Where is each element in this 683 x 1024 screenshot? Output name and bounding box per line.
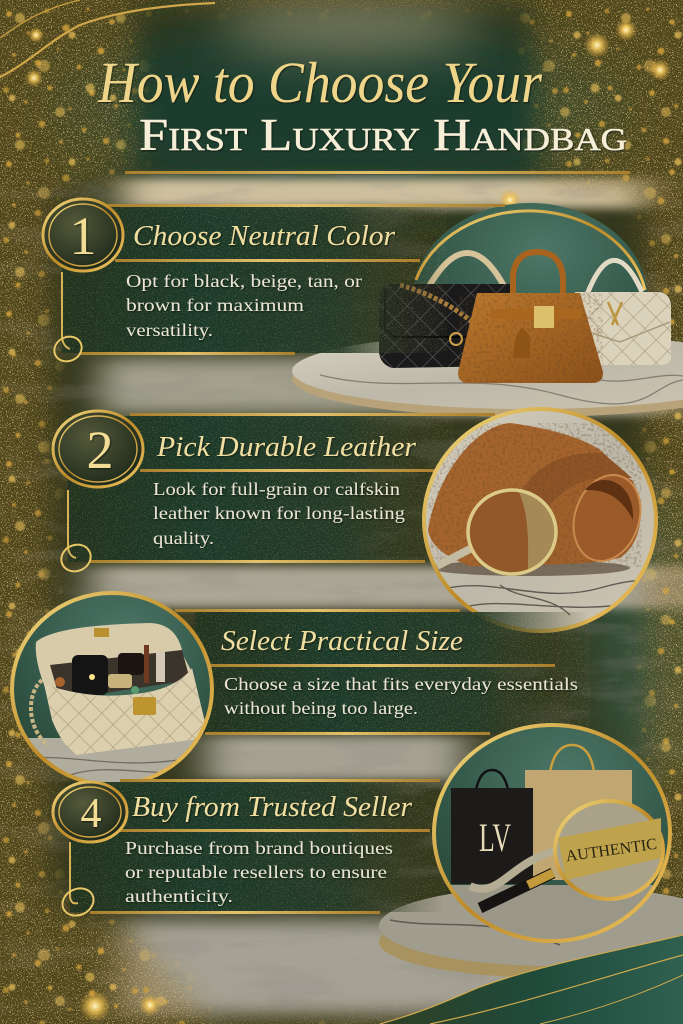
number badge 2: 2 <box>86 420 114 480</box>
step 2 image: rolled leather with magnifier <box>420 405 660 635</box>
quilted body <box>44 668 206 755</box>
step 4 image: shopping bags, tape and magnifier <box>430 722 675 947</box>
text 1: versatility. <box>126 320 213 340</box>
title line 1: How to Choose Your <box>97 50 542 115</box>
panel: step 1 <box>43 199 505 366</box>
text 1: Opt for black, beige, tan, or <box>126 271 362 291</box>
loop ornament <box>50 332 86 366</box>
magnifier <box>555 801 663 899</box>
text 4 <box>125 838 393 906</box>
heading 1: Choose Neutral Color <box>133 220 396 252</box>
step 3 image: open cream bag with essentials <box>10 590 215 790</box>
number badge 4 <box>53 782 127 842</box>
kraft shopping bag <box>525 745 632 880</box>
text 4: authenticity. <box>125 886 233 906</box>
step 1 image ring <box>416 211 645 290</box>
loop ornament <box>58 883 98 921</box>
black quilted bag <box>379 253 512 368</box>
black shopping bag: LV <box>479 815 511 860</box>
bag contents <box>50 645 188 695</box>
text 3: Choose a size that fits everyday essentials <box>224 674 578 694</box>
open flap <box>36 623 192 690</box>
text 1 <box>126 271 362 340</box>
text 2: leather known for long-lasting <box>153 503 405 523</box>
cream bag <box>575 260 671 365</box>
text 4: Purchase from brand boutiques <box>125 838 393 858</box>
text 2: Look for full-grain or calfskin <box>153 479 400 499</box>
number badge 1 <box>43 199 123 271</box>
number badge 1: 1 <box>70 206 96 266</box>
text 3: without being too large. <box>224 698 418 718</box>
heading 4: Buy from Trusted Seller <box>132 791 413 823</box>
text 2 <box>153 479 405 548</box>
panel: step 2 <box>53 411 495 576</box>
authentic label: AUTHENTIC <box>565 836 658 865</box>
title block <box>97 50 630 174</box>
number badge 2 <box>53 411 143 487</box>
step 4 pedestal <box>379 886 683 978</box>
measuring tape <box>470 850 560 889</box>
loop ornament <box>57 540 95 576</box>
bottom wave <box>380 935 683 1024</box>
panel: step 4 <box>53 779 445 921</box>
heading 3: Select Practical Size <box>221 625 463 657</box>
black shopping bag <box>451 770 533 884</box>
text 3 <box>224 674 578 718</box>
pen <box>480 873 553 908</box>
text 1: brown for maximum <box>126 295 304 315</box>
pedestal 1 <box>292 333 683 417</box>
magnifier <box>437 490 556 574</box>
title line 2: First Luxury Handbag <box>139 109 627 160</box>
heading 2: Pick Durable Leather <box>156 431 417 463</box>
brown bag <box>458 252 603 383</box>
number badge 4: 4 <box>80 791 102 837</box>
text 4: or reputable resellers to ensure <box>125 862 387 882</box>
text 2: quality. <box>153 528 214 548</box>
step 1 image: three handbags on marble pedestal <box>292 203 683 417</box>
leather roll <box>428 423 651 570</box>
panel: step 3 <box>175 609 590 735</box>
